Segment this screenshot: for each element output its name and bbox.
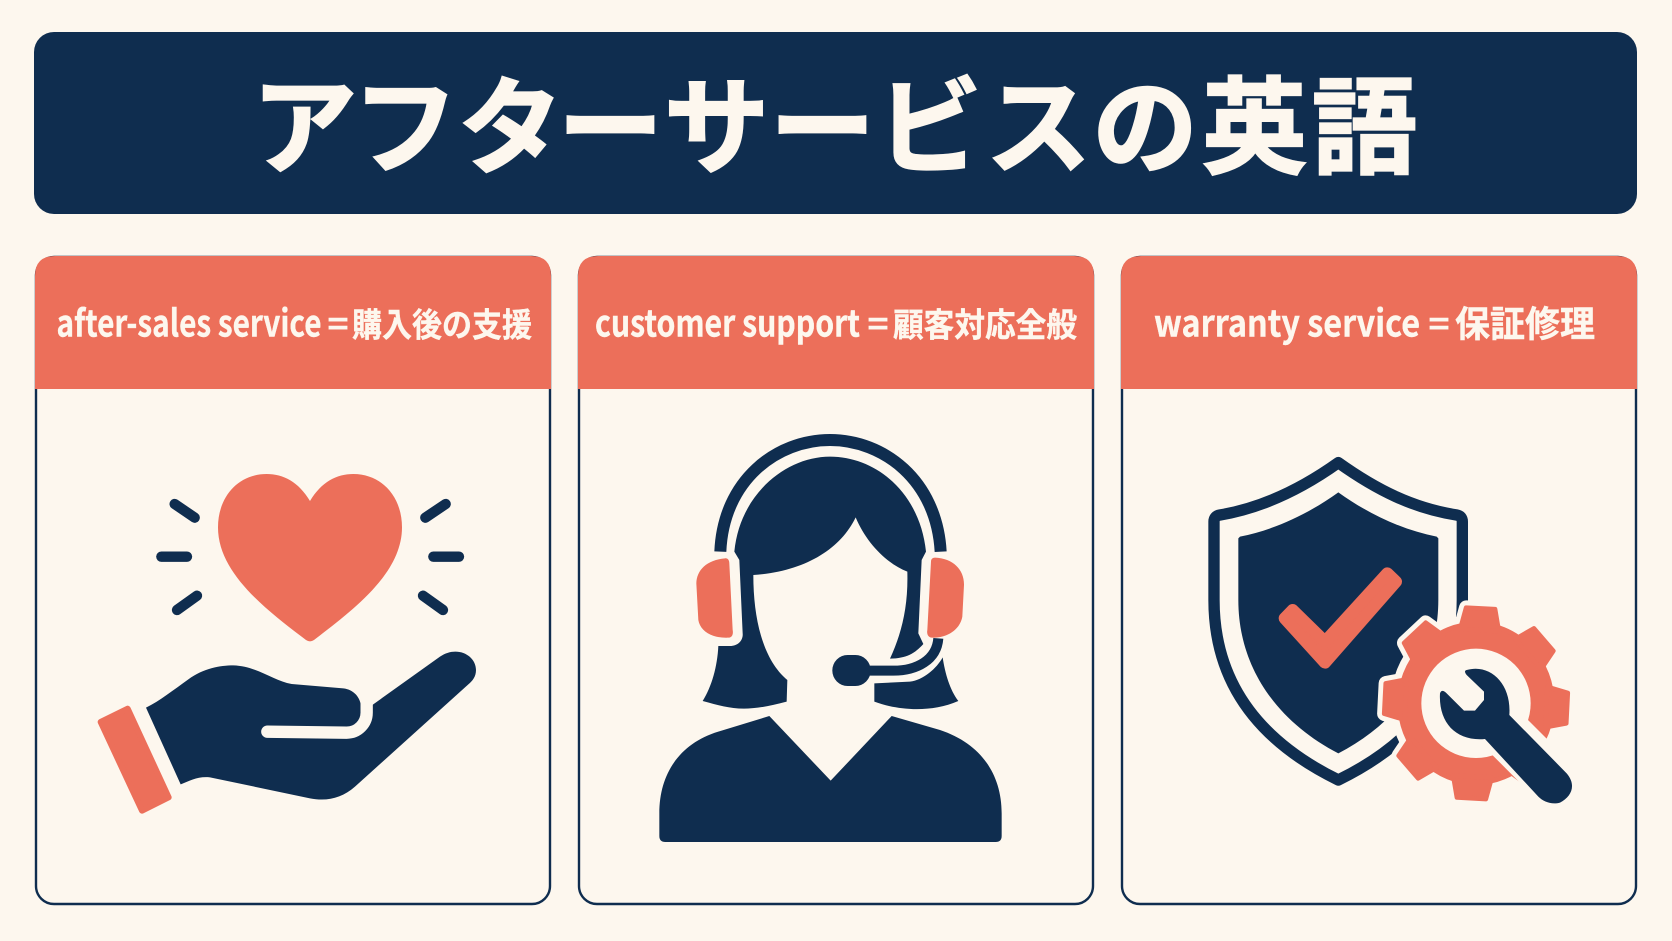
- panel header: [578, 256, 1094, 389]
- icon: support agent with headset: [659, 440, 1002, 842]
- check mark: [1285, 573, 1396, 663]
- headband: [720, 440, 941, 552]
- cuff: [101, 709, 169, 811]
- panel header: [1121, 256, 1637, 389]
- heart: [218, 474, 402, 641]
- wrench: [1440, 669, 1572, 803]
- gear halo: [1384, 607, 1568, 799]
- hair: [703, 457, 926, 709]
- left ear cup: [696, 558, 733, 638]
- sparkle rays: [161, 504, 459, 610]
- header text: ＝: [865, 298, 891, 346]
- header text: ＝: [325, 298, 351, 346]
- header text: customer support: [595, 294, 860, 348]
- hand: [146, 652, 476, 800]
- right ear cup: [927, 558, 964, 638]
- inner shield: [1238, 492, 1438, 753]
- microphone: [832, 638, 938, 686]
- header text: 購入後の支援: [352, 298, 532, 346]
- gear: [1384, 607, 1568, 799]
- header text: 顧客対応全般: [893, 298, 1077, 346]
- header text: 保証修理: [1455, 296, 1595, 348]
- body: [659, 716, 1002, 842]
- panel: warranty service: [1121, 256, 1637, 904]
- panel header: [35, 256, 551, 389]
- panel: customer support: [578, 256, 1094, 904]
- header text: after-sales service: [56, 294, 322, 348]
- title text: アフターサービスの英語: [252, 44, 1417, 196]
- icon: hand holding heart: [101, 474, 476, 811]
- panel: after-sales service: [35, 256, 551, 904]
- lower right hair: [874, 657, 958, 709]
- header text: ＝: [1426, 298, 1452, 346]
- shield outline: [1214, 463, 1462, 780]
- icon: shield with check and gear wrench: [1214, 463, 1587, 814]
- title banner: [34, 32, 1637, 214]
- header text: warranty service: [1154, 294, 1420, 348]
